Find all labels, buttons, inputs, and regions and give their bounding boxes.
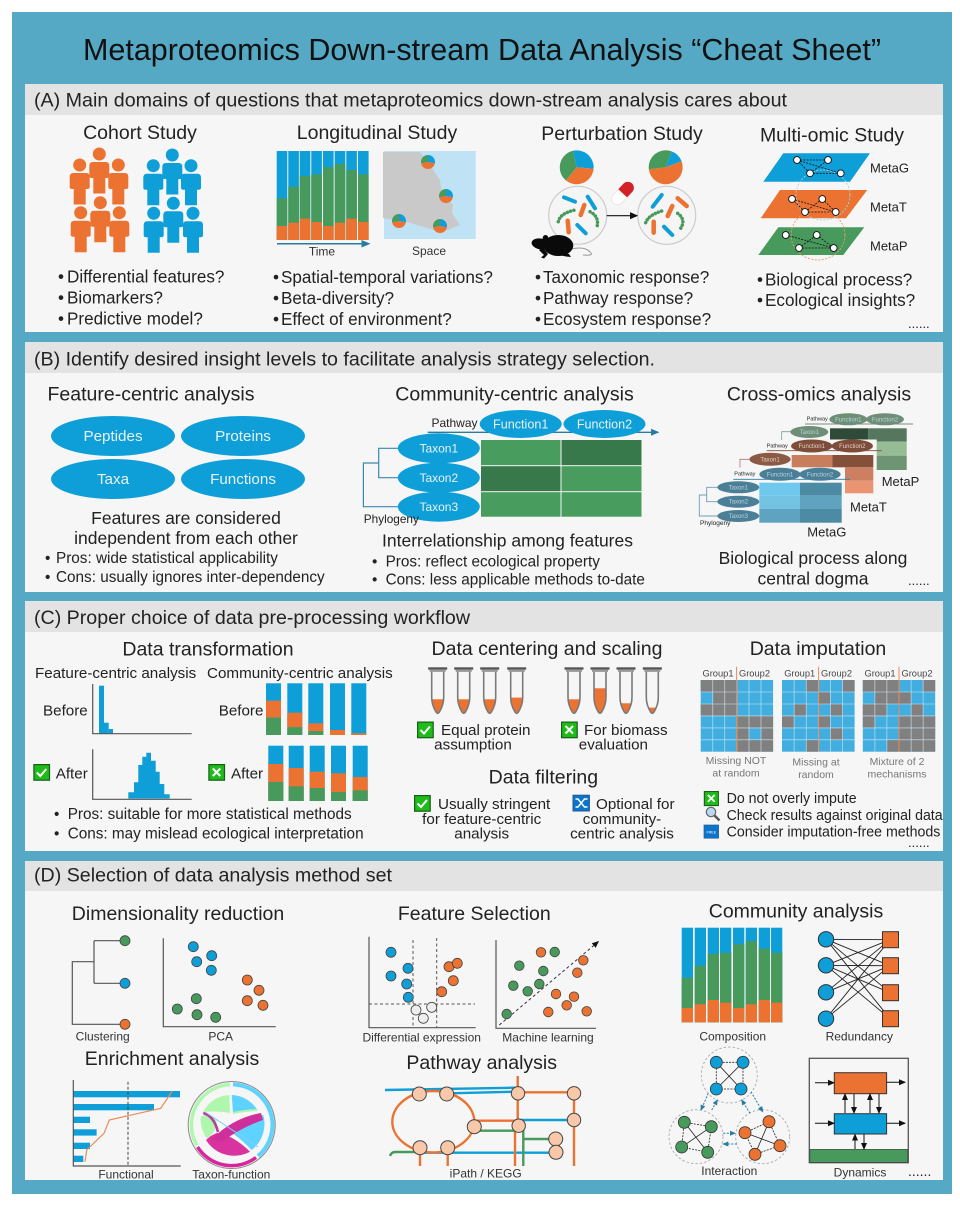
imputation recommendations: Do not overly impute [727,791,857,807]
diagram: omic layers network: MetaG [870,161,909,176]
grid: missing at random [782,667,855,781]
chart: feature histogram before [43,684,192,734]
cohort questions: • [58,268,64,287]
chart: community composition after: After [231,765,263,782]
MetaT layer [732,440,882,496]
diagram: feature ellipses: Peptides [83,428,143,445]
MetaG layer [699,468,850,527]
feature-centric description [45,508,325,586]
perturbation questions: • [535,268,541,287]
data filtering heading: Data filtering [489,766,598,788]
transformation pros and cons: • [54,806,59,823]
MetaG layer: Taxon3 [729,514,749,520]
chart: spatial map with pies [383,151,476,258]
diagram: metabolic pathway map [385,1076,581,1180]
feature-centric description: Pros: wide statistical applicability [56,550,278,567]
grid: missing not at random: at random [712,768,760,780]
perturbation questions: • [535,310,541,329]
icon: blue cohort people [143,148,203,253]
grid: missing not at random: Group1 [702,669,734,679]
chart subtitles: Community-centric analysis [207,665,393,682]
icon: orange cohort people [70,148,129,252]
diagram: feature ellipses [51,416,305,499]
cross-omics description: Biological process along [719,548,907,568]
dimensionality reduction heading: Dimensionality reduction [72,903,284,925]
panel C heading: (C) Proper choice of data pre-processing workflow [34,607,471,629]
chart: differential expression volcano [362,937,481,1045]
centering notes: assumption [434,736,512,753]
diagram: feature ellipses: Taxa [97,471,130,488]
diagram: interaction modules [669,1047,790,1178]
longitudinal questions: • [273,310,279,329]
imputation recommendations: Consider imputation-free methods [727,825,940,841]
longitudinal study heading: Longitudinal Study [297,122,457,144]
panel B heading: (B) Identify desired insight levels to facilitate analysis strategy selection. [34,348,655,370]
diagram: functional redundancy network [818,932,898,1044]
multi-omic study heading: Multi-omic Study [760,124,904,146]
MetaG layer: Function2 [807,472,834,478]
data imputation heading: Data imputation [750,638,886,660]
chart subtitles: Feature-centric analysis [35,665,197,682]
MetaG layer: Pathway [734,472,756,478]
diagram: stacked omics heatmaps: MetaT [850,500,887,515]
community-centric description [372,530,645,588]
cross-omics description: central dogma [758,568,869,588]
feature selection heading: Feature Selection [398,903,551,925]
icon: microbes before [549,186,607,244]
icon: pill [609,179,636,207]
cross-omics description: ...... [908,573,930,588]
MetaG layer: Taxon2 [729,500,749,506]
diagram: community dynamics [809,1058,908,1180]
multi-omic questions: • [757,271,763,290]
diagram: omic layers network: MetaT [870,200,907,215]
perturbation questions: • [535,289,541,308]
chart: PCA scatter [163,938,276,1044]
transformation pros and cons [54,806,364,842]
diagram: stacked omics heatmaps [699,413,919,540]
perturbation questions: Pathway response? [543,289,693,308]
diagram: functional redundancy network: Redundancy [826,1030,893,1044]
panel D: analysis method set [25,861,943,1182]
grid: mixture of mechanisms [863,667,935,781]
centering notes: Equal protein [441,722,531,739]
perturbation questions: Ecosystem response? [543,310,711,329]
chart: differential expression volcano: Differential expression [362,1031,481,1045]
grid: missing at random: Missing at [792,757,840,769]
centering notes [418,722,668,753]
chart: community composition before [219,683,366,735]
multi-omic questions [757,271,930,331]
chart: community composition before: Before [219,703,263,720]
chart: functional enrichment bars [73,1080,181,1182]
MetaT layer: Taxon1 [760,457,780,463]
grid: missing at random: random [798,769,834,781]
filtering note: feature-centric: analysis [454,825,510,842]
chart: clustering dendrogram [72,936,130,1044]
longitudinal questions: Effect of environment? [281,310,452,329]
chart: taxon-function chord diagram [188,1082,275,1182]
cohort questions [58,268,224,328]
chart: composition bars: Composition [699,1030,766,1044]
community analysis heading: Community analysis [709,900,883,922]
diagram: taxon-function heatmap: Pathway [432,416,478,430]
grid: missing at random: Group1 [784,669,815,679]
diagram: feature ellipses: Proteins [215,428,271,445]
chart: functional enrichment bars: Functional [98,1168,154,1182]
feature-centric heading: Feature-centric analysis [48,384,255,406]
MetaG layer: Phylogeny [700,520,731,527]
chart: feature histogram after: After [56,765,88,782]
cohort questions: • [58,288,64,308]
filtering note: feature-centric [415,796,551,842]
grid: mixture of mechanisms: Group1 [864,669,896,679]
imputation recommendations: Check results against original data [727,808,943,824]
centering notes: evaluation [579,736,648,753]
panel A heading: (A) Main domains of questions that metaproteomics down-stream analysis cares about [34,90,788,112]
MetaP layer: Function2 [872,417,899,423]
community-centric description: • [372,572,377,588]
diagram: stacked omics heatmaps: MetaP [882,474,919,489]
filtering note: feature-centric: for feature-centric [422,811,542,828]
community-centric description: Pros: reflect ecological property [386,554,600,570]
MetaT layer: Pathway [767,444,788,450]
chart: machine learning scatter: Machine learning [502,1031,594,1045]
pathway analysis heading: Pathway analysis [406,1052,557,1074]
diagram: taxon-function heatmap: Function1 [493,418,548,432]
grid: mixture of mechanisms: Group2 [901,669,933,679]
feature-centric description: Cons: usually ignores inter-dependency [56,569,325,586]
diagram: feature ellipses: Functions [210,471,276,488]
cohort questions: Biomarkers? [67,288,163,308]
title: Metaproteomics Down-stream Data Analysis “Cheat Sheet” [83,34,881,67]
longitudinal questions: Spatial-temporal variations? [281,268,493,287]
MetaG layer: Function1 [767,472,794,478]
imputation recommendations [704,791,943,850]
enrichment analysis heading: Enrichment analysis [85,1048,259,1070]
filtering note: community-centric: centric analysis [570,825,674,842]
chart: taxon-function chord diagram: Taxon-function [192,1168,270,1182]
MetaT layer: Function1 [799,444,826,450]
icon: microbes after [638,186,696,244]
imputation recommendations: FREE [707,830,717,834]
diagram: taxon-function heatmap: Phylogeny [364,512,419,526]
cohort questions: Differential features? [67,268,224,287]
transformation pros and cons: Pros: suitable for more statistical methods [68,806,352,823]
perturbation questions [535,268,711,329]
chart: composition bars [682,928,782,1044]
cohort study heading: Cohort Study [83,122,197,144]
ellipsis: ...... [908,1163,931,1179]
feature-centric description: • [45,550,50,567]
MetaP layer: Taxon1 [800,430,820,436]
diagram: interaction modules: Interaction [701,1164,757,1178]
diagram: taxon-function heatmap: Taxon2 [419,471,458,485]
diagram: stacked omics heatmaps: MetaG [807,525,846,540]
filtering note: feature-centric: Usually stringent [438,796,551,813]
chart: spatial map with pies: Space [412,244,446,258]
data centering heading: Data centering and scaling [432,638,662,660]
MetaP layer: Pathway [807,417,828,423]
filtering note: community-centric: Optional for [596,796,675,813]
multi-omic questions: Biological process? [765,271,912,290]
diagram: omic layers network [758,153,909,260]
diagram: taxon-function heatmap: Function2 [577,418,632,432]
chart: machine learning scatter [496,940,598,1045]
MetaT layer: Function2 [839,444,866,450]
chart: stacked bars over time: Time [309,245,335,259]
icon: biomass tubes [564,667,662,717]
perturbation questions: Taxonomic response? [543,268,709,287]
longitudinal questions: • [273,289,279,308]
chart: community composition after [209,746,368,801]
chart: clustering dendrogram: Clustering [76,1030,130,1044]
centering notes: For biomass [584,722,668,739]
community-centric heading: Community-centric analysis [395,384,634,406]
chart: PCA scatter: PCA [208,1030,233,1044]
chart subtitles [35,665,393,682]
diagram: taxon-function heatmap [363,410,658,526]
feature-centric description: Features are considered [91,508,281,528]
longitudinal questions: • [273,268,279,287]
diagram: community dynamics: Dynamics [834,1166,886,1180]
imputation recommendations: ...... [908,835,930,850]
panel B: insight levels [25,342,943,592]
icon: equal protein tubes [428,667,526,716]
filtering note: community-centric [570,795,675,842]
diagram: taxon-function heatmap: Taxon1 [419,442,458,456]
grid: mixture of mechanisms: Mixture of 2 [870,756,925,768]
icon: before pie [560,150,594,184]
panel A: domains of questions [25,84,943,332]
multi-omic questions: ...... [908,316,930,331]
longitudinal questions: Beta-diversity? [281,289,394,308]
transformation pros and cons: Cons: may mislead ecological interpretation [68,825,364,842]
chart: stacked bars over time [277,151,369,259]
feature-centric description: independent from each other [74,528,298,548]
filtering note: community-centric: community- [583,811,661,828]
panel D heading: (D) Selection of data analysis method set [34,864,393,886]
multi-omic questions: Ecological insights? [765,291,915,310]
cross-omics heading: Cross-omics analysis [727,384,911,406]
grid: mixture of mechanisms: mechanisms [868,769,926,781]
MetaP layer [782,413,913,470]
community-centric description: • [372,554,377,570]
grid: missing not at random: Group2 [739,669,770,679]
grid: missing not at random: Missing NOT [706,755,767,767]
feature-centric description: • [45,569,50,586]
community-centric description: Interrelationship among features [382,530,633,550]
chart: feature histogram before: Before [43,703,88,720]
transformation pros and cons: • [54,825,59,842]
icon: mouse [531,235,591,258]
grid: missing not at random [701,667,773,780]
longitudinal questions [273,268,493,329]
panel C: pre-processing workflow [25,601,943,851]
diagram: omic layers network: MetaP [870,239,908,254]
icon: after pie [649,150,683,184]
diagram: taxon-function heatmap: Taxon3 [419,500,458,514]
data transformation heading: Data transformation [122,638,294,660]
cohort questions: Predictive model? [67,310,203,328]
arrow: perturbation effect [607,215,637,217]
perturbation study heading: Perturbation Study [541,123,703,145]
grid: missing at random: Group2 [821,669,852,679]
chart: feature histogram after [34,749,192,799]
multi-omic questions: • [757,291,763,310]
diagram: metabolic pathway map: iPath / KEGG [450,1166,522,1180]
cohort questions: • [58,310,64,328]
MetaP layer: Function1 [835,417,862,423]
MetaG layer: Taxon1 [729,485,749,491]
cross-omics description [719,548,930,588]
community-centric description: Cons: less applicable methods to-date [386,572,645,588]
